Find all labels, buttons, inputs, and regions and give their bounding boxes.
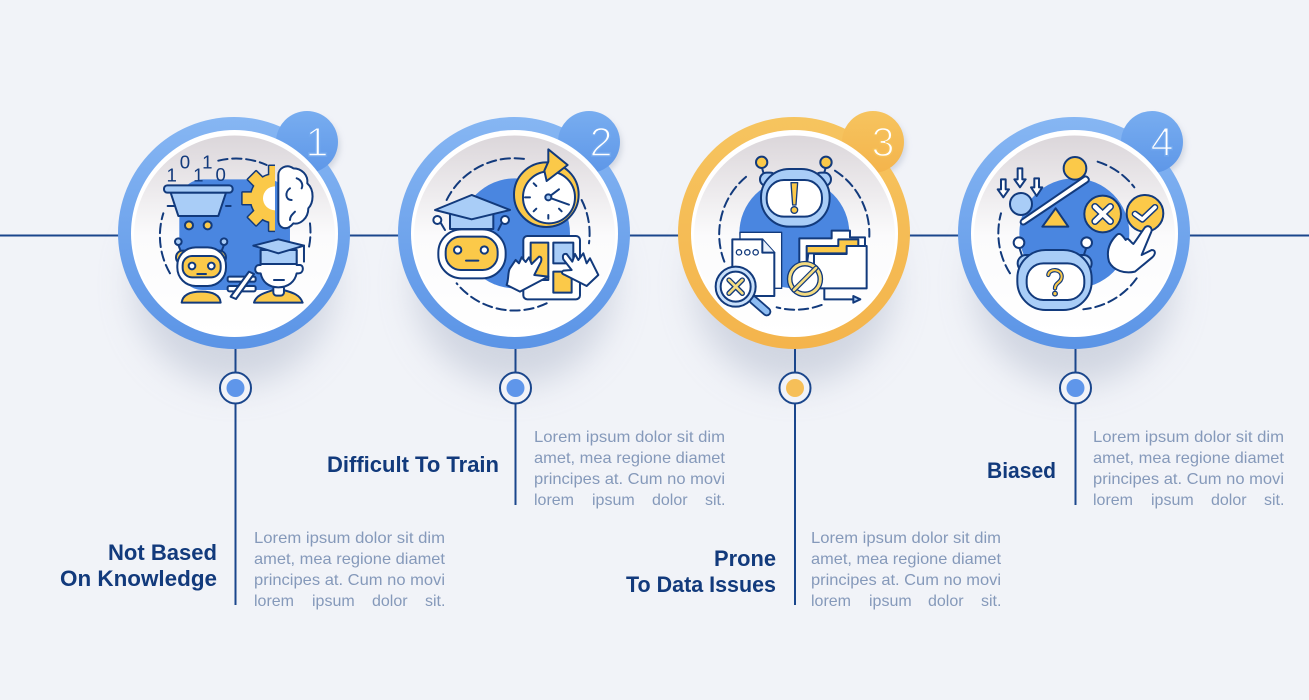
text block: step 3 description: amet, mea regione diamet [811, 551, 1002, 568]
icon: robot versus human knowledge: 1 [202, 151, 213, 172]
heading: Prone To Data Issues: To Data Issues [626, 572, 776, 597]
number badge 2: 2 [590, 119, 612, 165]
number badge 1: 1 [306, 119, 328, 165]
step 4 connector dot [1060, 372, 1091, 404]
text block: step 4 description: sit. [1264, 492, 1284, 509]
number badge 4: 4 [1151, 119, 1173, 165]
text block: step 3 description: ipsum [869, 593, 912, 610]
icon: robot versus human knowledge: 0 [180, 151, 190, 172]
step 2: circle badge [398, 111, 630, 505]
text block: step 1 description: sit. [425, 593, 445, 610]
text block: step 3 description: dolor [928, 593, 964, 610]
icon: robot training with clock and tablet [433, 149, 598, 311]
step 3 connector dot [780, 372, 810, 404]
step 1: circle badge [118, 111, 350, 605]
heading: Biased: Biased [987, 458, 1056, 483]
text block: step 4 description: lorem [1093, 492, 1133, 509]
number badge 3 [678, 111, 910, 349]
text block: step 2 description: lorem [534, 492, 574, 509]
text block: step 1 description: principes at. Cum no movi [254, 572, 445, 589]
text block: step 4 description: principes at. Cum no movi [1093, 471, 1284, 488]
heading: Not Based On Knowledge: On Knowledge [60, 566, 217, 591]
number badge 4 [958, 111, 1190, 349]
text block: step 2 description: Lorem ipsum dolor sit dim [534, 429, 725, 446]
text block: step 2 description: amet, mea regione diamet [534, 450, 726, 467]
text block: step 4 description: Lorem ipsum dolor sit dim [1093, 429, 1284, 446]
text block: step 1 description: ipsum [312, 593, 355, 610]
heading: Not Based On Knowledge: Not Based [108, 540, 217, 565]
text block: step 2 description: ipsum [592, 492, 635, 509]
number badge 3: 3 [872, 119, 894, 165]
text block: step 3 description: Lorem ipsum dolor sit dim [811, 530, 1001, 547]
text block: step 1 description [254, 530, 446, 610]
text block: step 1 description: Lorem ipsum dolor sit dim [254, 530, 445, 547]
heading: Difficult To Train: Difficult To Train [327, 452, 499, 477]
text block: step 1 description: lorem [254, 593, 294, 610]
text block: step 1 description: amet, mea regione diamet [254, 551, 446, 568]
heading: Not Based On Knowledge [60, 540, 217, 591]
number badge 2 [398, 111, 630, 349]
text block: step 3 description: sit. [981, 593, 1001, 610]
icon: robot alert with documents and folders [716, 157, 869, 312]
icon: robot versus human knowledge: 1 [166, 165, 177, 186]
text block: step 2 description [534, 429, 726, 509]
text block: step 3 description: principes at. Cum no movi [811, 572, 1001, 589]
step 2 connector dot [500, 372, 531, 404]
icon: biased scale, choice marks and robot [998, 157, 1163, 310]
text block: step 3 description [811, 530, 1002, 610]
text block: step 4 description: amet, mea regione diamet [1093, 450, 1285, 467]
text block: step 2 description: sit. [705, 492, 725, 509]
text block: step 4 description: ipsum [1151, 492, 1194, 509]
icon: robot versus human knowledge: 1 [193, 165, 204, 186]
icon: robot versus human knowledge: 0 [215, 164, 226, 185]
text block: step 2 description: dolor [652, 492, 688, 509]
icon: robot versus human knowledge [160, 151, 313, 303]
heading: Prone To Data Issues [626, 546, 776, 597]
step 3: circle badge [678, 111, 910, 605]
number badge 1 [118, 111, 350, 349]
text block: step 2 description: principes at. Cum no movi [534, 471, 725, 488]
text block: step 4 description: dolor [1211, 492, 1247, 509]
text block: step 3 description: lorem [811, 593, 851, 610]
step 4: circle badge [958, 111, 1190, 505]
text block: step 1 description: dolor [372, 593, 408, 610]
heading: Prone To Data Issues: Prone [714, 546, 776, 571]
text block: step 4 description [1093, 429, 1285, 509]
step 1 connector dot [220, 372, 251, 404]
